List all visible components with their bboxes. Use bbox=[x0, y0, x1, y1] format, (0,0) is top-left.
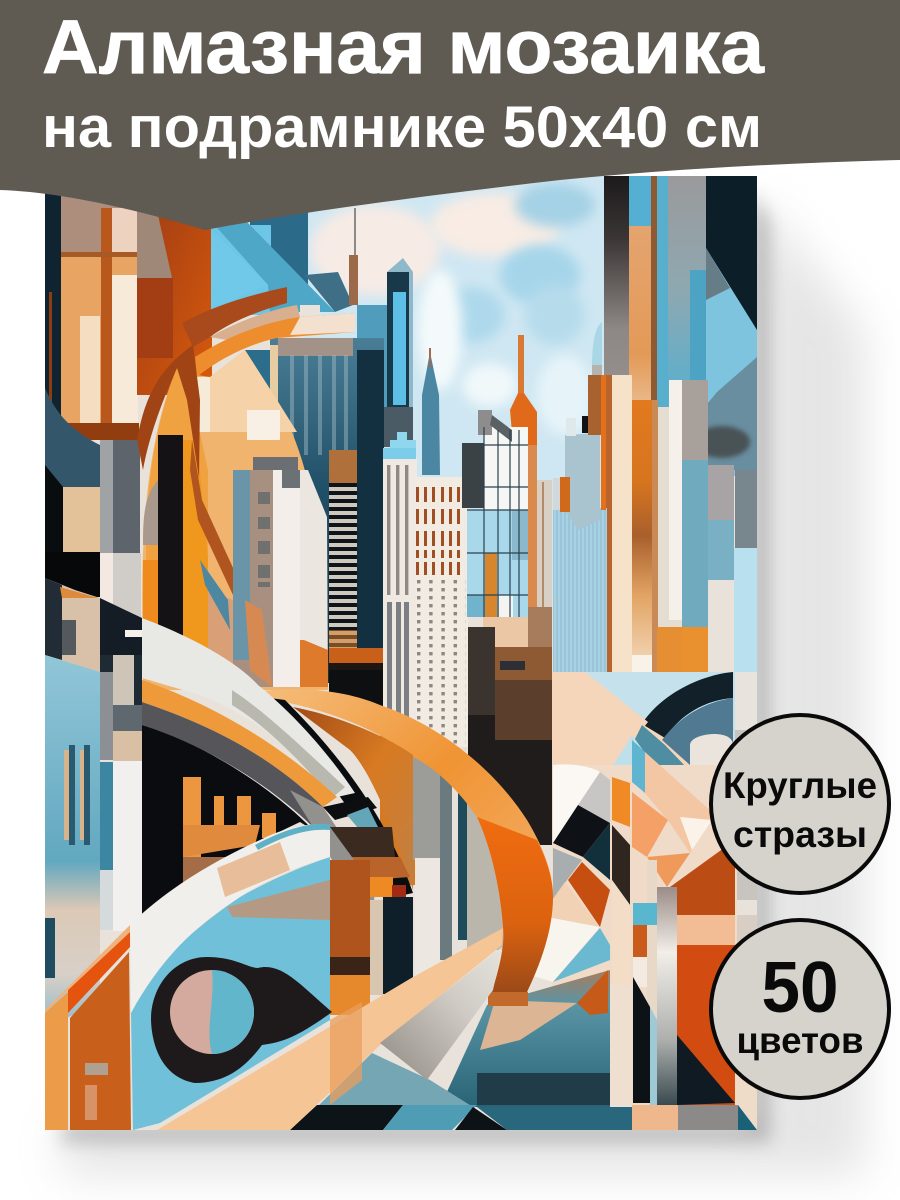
painting: abstract city bbox=[45, 176, 757, 1130]
lower stretch of right columns bbox=[606, 375, 757, 672]
sky bbox=[305, 176, 610, 596]
sky bridge and arcs, right middle bbox=[552, 672, 735, 765]
left lower pale blue panel bbox=[45, 655, 143, 1030]
bridge: white band and blue panel bbox=[130, 824, 370, 1130]
large orange arch bbox=[247, 689, 553, 1006]
badge: 50 colours: 50 bbox=[762, 948, 838, 1028]
header banner bbox=[0, 0, 900, 230]
glass tower and orange spire bbox=[462, 335, 552, 617]
badge: 50 colours bbox=[711, 920, 889, 1098]
eye circle motif bbox=[151, 957, 332, 1083]
badge: round rhinestones bbox=[711, 715, 889, 893]
title: second line: на подрамнике 50х40 см bbox=[42, 95, 762, 160]
white towers bbox=[383, 432, 468, 750]
badge: 50 colours: цветов bbox=[736, 1020, 864, 1061]
bottom teal zone bbox=[290, 970, 738, 1130]
tall vertical columns, upper right bbox=[604, 176, 757, 548]
lower-left black panel with orange bars bbox=[142, 725, 313, 925]
big arch interior bbox=[137, 345, 328, 690]
left column middle bbox=[45, 388, 142, 705]
blue striped mid block bbox=[553, 322, 607, 672]
top-left column bbox=[45, 190, 139, 440]
badge: round rhinestones: стразы bbox=[733, 814, 867, 855]
right lower facets bbox=[530, 740, 737, 1105]
canvas drop shadow bbox=[62, 190, 865, 1175]
building with windows bbox=[233, 457, 328, 687]
title: first line: Алмазная мозаика bbox=[42, 5, 765, 90]
rust and orange arch bands bbox=[182, 287, 355, 377]
dark tower behind arch bbox=[245, 338, 384, 710]
top centre blue shapes bbox=[211, 212, 353, 316]
antenna and distant skyscrapers bbox=[349, 208, 440, 475]
badge: round rhinestones: Круглые bbox=[723, 765, 877, 806]
white upper band, orange band and grey band bbox=[142, 618, 374, 900]
dark window shards under the arches bbox=[323, 797, 413, 995]
bottom-left orange panels bbox=[45, 925, 131, 1130]
inner rust and black arc bbox=[274, 698, 413, 894]
peach road diagonals bbox=[157, 928, 503, 1130]
right column at canvas edge bbox=[735, 730, 757, 1130]
dark brown tower bbox=[468, 607, 552, 845]
centre columns under orange arch bbox=[380, 736, 504, 960]
rust pillar bbox=[137, 205, 212, 395]
